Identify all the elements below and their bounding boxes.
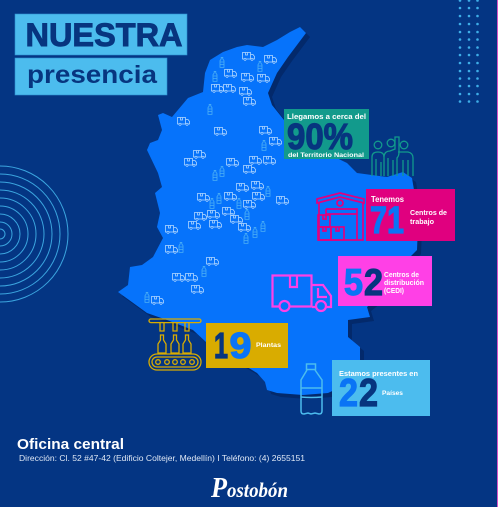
dot grid decoration [459, 0, 479, 103]
panel: countries 22 [332, 360, 430, 416]
panel: countries 22: 2 [339, 372, 358, 415]
panel: territory 90% [284, 109, 369, 159]
title: presencia [27, 61, 158, 89]
panel: countries 22: 2 [359, 372, 378, 415]
panel: plants 19: 9 [230, 325, 252, 366]
title: NUESTRA [26, 17, 183, 53]
panel: countries 22: Estamos presentes en [339, 369, 418, 378]
map bottle markers [145, 57, 270, 302]
panel: distribution centers 52: distribución [384, 278, 424, 287]
office address [17, 437, 305, 463]
panel: distribution centers 52: Centros de [384, 270, 419, 279]
panel: plants 19 [206, 323, 288, 368]
icon: bottle [301, 364, 322, 414]
panel: work centers 71: Centros de [410, 208, 447, 217]
panel: work centers 71: 71 [370, 200, 404, 242]
panel: distribution centers 52: 5 [344, 261, 363, 303]
icon: people [372, 137, 413, 176]
map truck markers [152, 52, 288, 304]
concentric arcs decoration [0, 166, 68, 302]
panel: work centers 71 [366, 189, 455, 242]
panel: work centers 71: trabajo [410, 217, 434, 226]
office address: Oficina central [17, 437, 124, 453]
panel: territory 90%: del Territorio Nacional [288, 152, 364, 159]
map of Colombia [118, 27, 422, 399]
icon: warehouse [317, 193, 364, 240]
panel: plants 19: 1 [214, 325, 228, 366]
office address: Dirección: Cl. 52 #47-42 (Edificio Coltejer, Medellín) I Teléfono: (4) 2655151 [19, 453, 305, 463]
panel: distribution centers 52 [338, 256, 432, 306]
panel: distribution centers 52: 2 [364, 261, 383, 303]
icon: delivery truck [272, 276, 331, 311]
panel: distribution centers 52: (CEDI) [384, 286, 405, 295]
title [15, 14, 187, 95]
panel: plants 19: Plantas [256, 342, 281, 349]
panel: territory 90%: 90% [287, 116, 353, 157]
panel: work centers 71: Tenemos [371, 195, 405, 204]
logo: Postobón: Postobón [210, 472, 288, 504]
panel: countries 22: Países [382, 390, 403, 397]
icon: bottling line [149, 319, 201, 370]
panel: territory 90%: Llegamos a cerca del [287, 112, 366, 121]
